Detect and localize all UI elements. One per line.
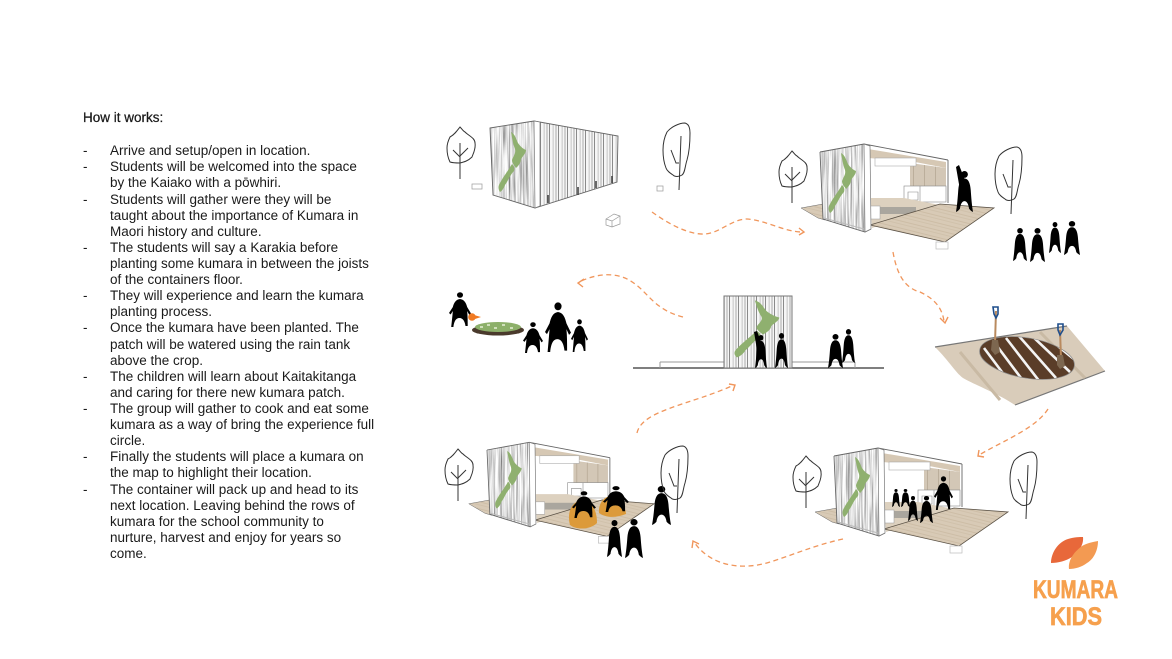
list of steps: The group will gather to cook and eat some: [110, 401, 369, 416]
list of steps: Students will be welcomed into the space: [110, 159, 357, 174]
icon: tall tree: [663, 123, 690, 190]
bean bags: [569, 496, 626, 529]
adult teaching: [934, 476, 953, 510]
list of steps: above the crop.: [110, 353, 203, 368]
open container: [801, 144, 994, 249]
icon: leaf tree: [779, 151, 807, 203]
scene 6: cooking and eating: [445, 442, 688, 558]
two figures: [828, 329, 855, 368]
list of steps: -: [83, 192, 88, 207]
list of steps: Students will gather were they will be: [110, 192, 331, 207]
scene 4: side elevation with map: [633, 296, 884, 368]
list of steps: the map to highlight their location.: [110, 465, 312, 480]
arrow: scene 4 to 5: [578, 275, 683, 317]
list of steps: by the Kaiako with a pōwhiri.: [110, 175, 281, 190]
list of steps: nurture, harvest and enjoy for years so: [110, 530, 341, 545]
wooden deck: [935, 326, 1105, 405]
icon: watering can: [468, 313, 481, 321]
text block: how it works: [83, 110, 374, 561]
list of steps: next location. Leaving behind the rows of: [110, 498, 355, 513]
ground line: [633, 367, 884, 369]
planting hole with joists: [979, 336, 1075, 380]
family: [523, 302, 588, 353]
seated students: [892, 489, 933, 523]
icon: tall tree: [661, 446, 688, 513]
small crates: [472, 184, 663, 227]
process arrows: [578, 212, 1048, 566]
list of steps: Once the kumara have been planted. The: [110, 320, 359, 335]
list of steps: patch will be watered using the rain tank: [110, 337, 350, 352]
students at the map: [754, 331, 788, 368]
standing person: [652, 486, 671, 525]
list of steps: The container will pack up and head to its: [110, 482, 359, 497]
icon: leaf tree: [793, 456, 821, 508]
group of four students: [1013, 221, 1080, 262]
scene 2: welcome into the open container: [779, 144, 1080, 262]
icon: tall tree: [995, 147, 1022, 214]
arrow: scene 5 to 6: [692, 539, 843, 566]
arrow: scene 2 to 3: [893, 252, 948, 323]
open container: [815, 448, 1008, 553]
person watering: [449, 292, 471, 327]
list of steps: [83, 143, 374, 561]
kumara patch: [472, 322, 524, 336]
scene 5: watering the patch: [449, 292, 588, 353]
scene 7: learning inside the container: [793, 448, 1037, 553]
list of steps: kumara as a way of bring the experience full: [110, 417, 374, 432]
open container: [469, 442, 654, 543]
scene 3: planting deck with spades: [935, 307, 1105, 405]
icon: tall tree: [1010, 452, 1037, 519]
seated people: [572, 486, 629, 518]
deck: [660, 362, 855, 368]
arrow: scene 6 to 4: [637, 384, 735, 433]
list of steps: planting process.: [110, 304, 212, 319]
list of steps: kumara for the school community to: [110, 514, 324, 529]
kaiako waving: [956, 165, 973, 212]
two students: [607, 519, 643, 558]
list of steps: -: [83, 482, 88, 497]
wordmark: [1033, 576, 1118, 631]
list of steps: taught about the importance of Kumara in: [110, 208, 358, 223]
list of steps: The students will say a Karakia before: [110, 240, 338, 255]
icon: leaf tree: [445, 449, 473, 501]
list of steps: Maori history and culture.: [110, 224, 262, 239]
container end with map: [724, 296, 792, 368]
icon: kumara pair: [1051, 537, 1098, 569]
list of steps: planting some kumara in between the joists: [110, 256, 369, 271]
list of steps: -: [83, 369, 88, 384]
list of steps: -: [83, 159, 88, 174]
list of steps: -: [83, 401, 88, 416]
list of steps: They will experience and learn the kumara: [110, 288, 364, 303]
list of steps: -: [83, 449, 88, 464]
spade left: [991, 307, 1000, 355]
list of steps: The children will learn about Kaitakitanga: [110, 369, 357, 384]
list of steps: -: [83, 288, 88, 303]
list of steps: Finally the students will place a kumara on: [110, 449, 364, 464]
scene 1: closed container arrives: [447, 121, 690, 227]
closed shipping container: [490, 121, 618, 208]
list of steps: and caring for there new kumara patch.: [110, 385, 345, 400]
list of steps: of the containers floor.: [110, 272, 243, 287]
list of steps: come.: [110, 546, 147, 561]
heading: how it works: How it works:: [83, 110, 163, 125]
list of steps: -: [83, 320, 88, 335]
arrow: scene 3 to 5: [978, 409, 1048, 457]
list of steps: -: [83, 240, 88, 255]
logo: kumara kids: [1033, 537, 1118, 631]
list of steps: Arrive and setup/open in location.: [110, 143, 310, 158]
list of steps: -: [83, 143, 88, 158]
icon: leaf tree: [447, 127, 475, 179]
arrow: scene 1 to 2: [652, 212, 804, 235]
wordmark: KIDS: [1050, 603, 1102, 631]
spade right: [1057, 324, 1065, 369]
wordmark: KUMARA: [1033, 576, 1118, 604]
list of steps: circle.: [110, 433, 145, 448]
